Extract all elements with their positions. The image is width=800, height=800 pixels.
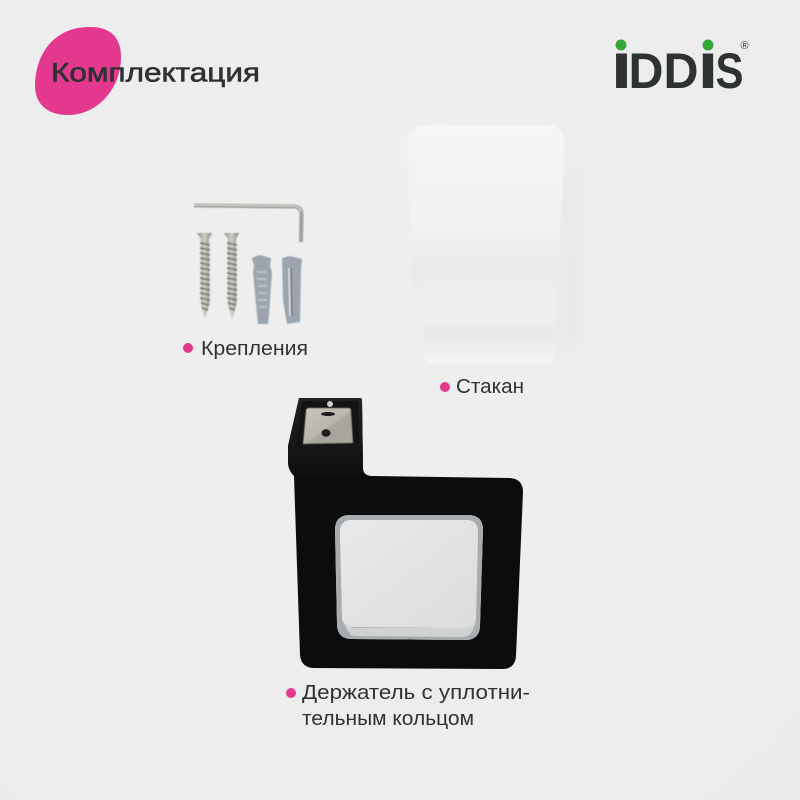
block recess	[296, 401, 359, 445]
black holder with sealing ring	[288, 398, 523, 669]
logo: IDDIS	[611, 40, 749, 99]
heading: pink blob with title	[35, 27, 260, 115]
steel plate	[303, 408, 353, 444]
logo: IDDIS: I	[698, 43, 718, 99]
heading: pink blob with title: Комплектация	[51, 58, 260, 88]
hex key	[194, 205, 302, 242]
label: holder: Держатель с уплотни-	[302, 681, 530, 704]
label: fasteners: Крепления	[201, 337, 308, 360]
ring window	[340, 520, 478, 628]
mounting block	[288, 398, 363, 477]
fasteners: hex key, screws, dowels	[194, 205, 302, 324]
cup shadow	[556, 165, 582, 358]
ring lower band	[344, 622, 476, 637]
cup lower part	[421, 270, 556, 363]
logo: IDDIS: ®	[740, 40, 749, 52]
logo: IDDIS: S	[716, 43, 744, 99]
logo: IDDIS: D	[628, 43, 664, 99]
screw 1	[197, 233, 212, 319]
label: holder	[286, 681, 530, 730]
logo: IDDIS: D	[664, 43, 698, 99]
plate hole	[322, 429, 330, 437]
sealing ring	[335, 515, 483, 640]
label: holder: тельным кольцом	[302, 707, 474, 730]
screw 2	[224, 233, 239, 319]
cup upper part	[407, 125, 565, 290]
plate screw	[327, 401, 333, 407]
logo: IDDIS: I	[611, 43, 632, 99]
plate slot	[321, 412, 335, 416]
dowel 2	[282, 256, 302, 324]
holder body	[288, 398, 523, 669]
glass cup	[407, 125, 582, 363]
dowel 1	[252, 255, 272, 324]
label: cup: Стакан	[456, 375, 524, 398]
